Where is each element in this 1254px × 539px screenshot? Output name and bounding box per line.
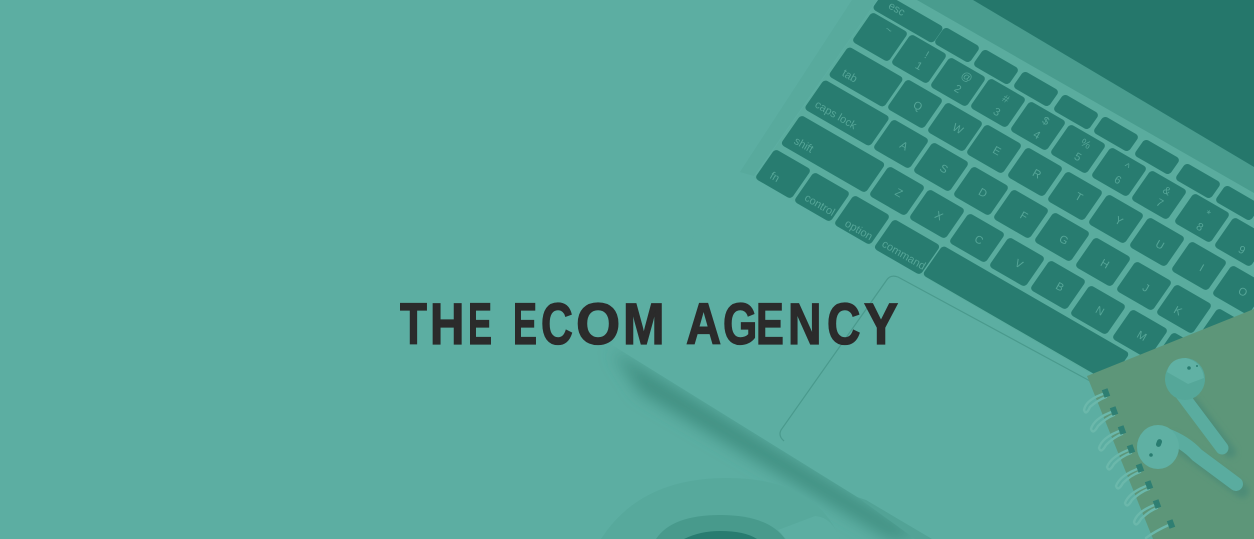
trackpad outline	[780, 276, 1090, 441]
key labels: command	[880, 238, 927, 273]
key labels: 8	[1194, 221, 1205, 234]
coffee saucer	[601, 478, 840, 539]
key labels: R	[1030, 167, 1043, 182]
logo wordmark: A	[686, 293, 721, 357]
keyboard keys	[755, 0, 1254, 383]
airpod lower	[1137, 425, 1236, 484]
key labels: 1	[913, 60, 924, 73]
key labels: H	[1098, 257, 1111, 272]
notebook	[1087, 309, 1254, 539]
key labels: ^	[1121, 161, 1132, 174]
key labels: fn	[768, 170, 781, 185]
key labels: X	[932, 209, 945, 224]
key labels: A	[897, 139, 910, 154]
key labels: !	[922, 49, 931, 61]
key labels: tab	[840, 67, 859, 85]
key labels: B	[1053, 280, 1066, 294]
key labels: &	[1160, 184, 1173, 199]
coffee cup	[656, 515, 840, 539]
key labels: 4	[1031, 129, 1042, 142]
key labels: Z	[893, 187, 905, 200]
key labels: %	[1078, 137, 1093, 152]
key labels: O	[1236, 285, 1250, 300]
key labels: 5	[1072, 151, 1083, 164]
key labels: N	[1093, 304, 1106, 319]
logo wordmark: H	[430, 293, 464, 357]
key labels: D	[976, 186, 989, 201]
logo wordmark: N	[788, 292, 822, 357]
logo wordmark: T	[400, 291, 427, 356]
key labels: V	[1012, 257, 1025, 272]
key labels: J	[1140, 282, 1151, 295]
key labels: K	[1171, 304, 1184, 319]
airpod upper	[1165, 358, 1222, 448]
logo wordmark: G	[723, 291, 757, 356]
key labels	[768, 0, 1250, 344]
key labels: Q	[911, 99, 925, 114]
key labels: M	[1135, 329, 1148, 344]
hero banner	[400, 0, 1254, 539]
key labels: 7	[1154, 197, 1165, 210]
key labels: shift	[792, 135, 815, 156]
key labels: option	[843, 218, 874, 243]
spiral binding	[1084, 388, 1175, 538]
logo wordmark: Y	[864, 292, 898, 357]
logo wordmark: C	[541, 291, 573, 356]
key labels: E	[990, 144, 1003, 158]
key labels: 6	[1112, 174, 1123, 187]
logo wordmark	[400, 291, 898, 357]
logo wordmark: C	[827, 292, 861, 357]
laptop body	[612, 0, 1254, 539]
key labels: 3	[991, 106, 1002, 119]
key labels: F	[1018, 210, 1030, 223]
key labels: ~	[883, 24, 894, 37]
key labels: *	[1203, 208, 1213, 221]
logo wordmark: E	[513, 292, 537, 357]
key labels: I	[1197, 262, 1206, 274]
key labels: S	[937, 162, 950, 176]
key labels: U	[1153, 238, 1166, 253]
key labels: esc	[886, 0, 907, 19]
logo wordmark: E	[468, 292, 492, 357]
key labels: control	[802, 192, 837, 219]
laptop shadow	[612, 350, 925, 539]
key labels: 2	[952, 83, 963, 96]
airpods shadow	[1172, 402, 1242, 491]
screen	[973, 0, 1254, 167]
key labels: Y	[1112, 214, 1125, 229]
key labels: T	[1073, 191, 1085, 204]
key labels: 9	[1236, 244, 1247, 257]
key labels: $	[1040, 115, 1051, 128]
hinge band	[917, 0, 1254, 193]
keyboard well	[754, 0, 1254, 372]
key labels: #	[1000, 93, 1012, 107]
logo wordmark: O	[576, 292, 620, 357]
logo wordmark: E	[756, 291, 784, 357]
key labels: @	[959, 69, 974, 85]
key labels: C	[972, 233, 985, 248]
key labels: G	[1057, 233, 1070, 248]
logo wordmark: M	[623, 293, 665, 357]
key labels: caps lock	[813, 99, 859, 132]
laptop front notch	[857, 497, 932, 539]
speaker grille	[740, 0, 877, 176]
key labels: W	[950, 122, 966, 138]
